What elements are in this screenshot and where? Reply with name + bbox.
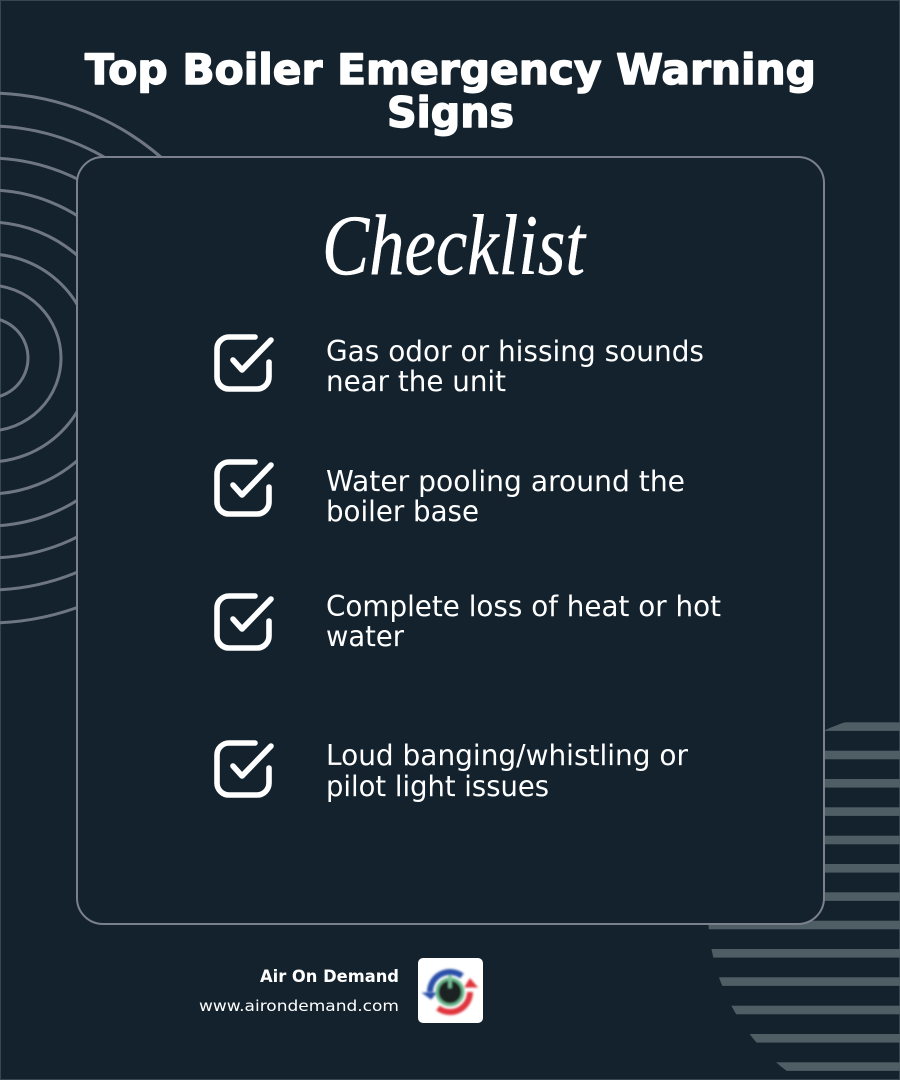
footer: website: www.airondemand.com: [199, 997, 399, 1015]
panel: checklist: [77, 157, 824, 924]
title: [85, 45, 816, 137]
icon: checkbox 3: [217, 596, 271, 648]
decorative striped circle: [700, 722, 900, 1071]
text: item 2: Water pooling around the: [326, 465, 685, 498]
text: item 1: Gas odor or hissing sounds: [326, 335, 704, 368]
text: item 4: [326, 739, 688, 803]
text: item 2: boiler base: [326, 495, 479, 528]
icon: checkbox 4: [217, 743, 271, 795]
title: Signs: [387, 88, 514, 137]
logo: [418, 958, 483, 1023]
icon: checkbox 1: [217, 337, 271, 389]
text: item 1: [326, 335, 704, 398]
text: item 2: [326, 465, 685, 528]
panel background: [77, 157, 824, 924]
decorative concentric arcs: [0, 93, 253, 623]
icon: checkbox 2: [217, 462, 271, 514]
text: item 1: near the unit: [326, 365, 506, 398]
text: item 4: Loud banging/whistling or: [326, 739, 688, 772]
text: item 3: [326, 590, 721, 653]
title: Top Boiler Emergency Warning: [85, 45, 816, 94]
text: item 3: water: [326, 620, 404, 653]
footer: company name: Air On Demand: [260, 967, 399, 986]
heading: Checklist: Checklist: [322, 197, 587, 293]
text: item 4: pilot light issues: [326, 770, 549, 803]
text: item 3: Complete loss of heat or hot: [326, 590, 721, 623]
